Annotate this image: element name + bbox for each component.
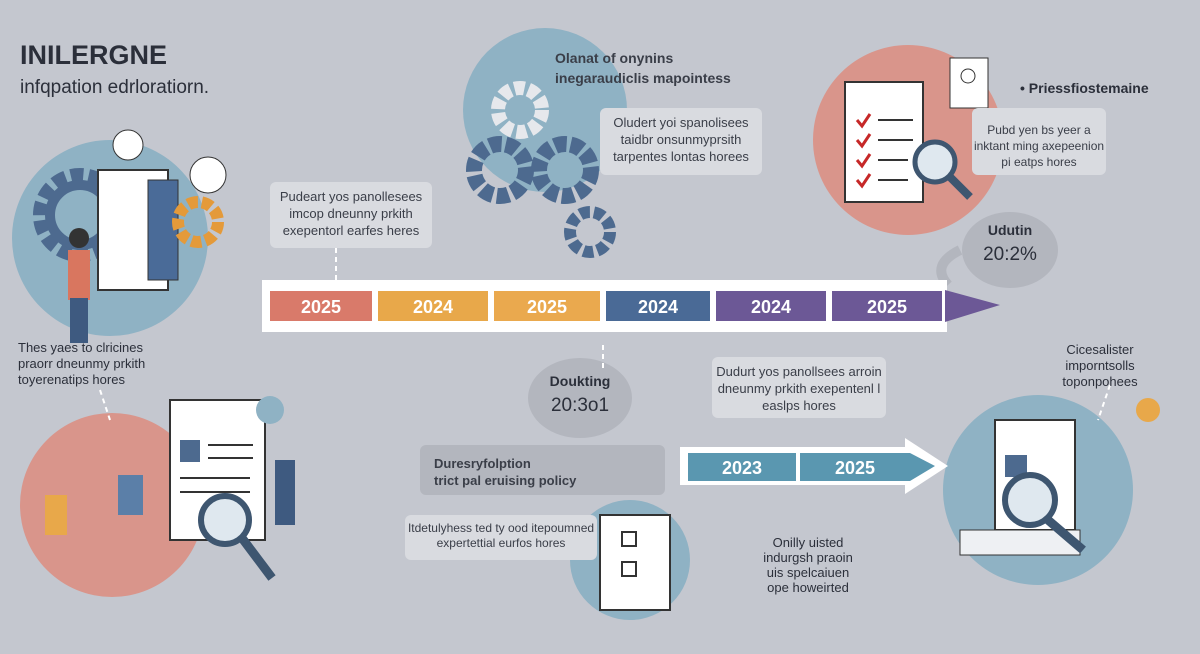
stat: Udutin [983,222,1037,265]
circle: left top [12,130,226,343]
text: left middle: praorr dneunmy prkith [18,356,145,371]
gear heading: inegaraudiclis mapointess [555,70,731,86]
circle: gears [463,28,627,252]
callout: policy: trict pal eruising policy [434,473,576,488]
text: right: Cicesalister imporntsolls toponpohees [1062,342,1138,389]
title: INILERGNE [20,40,167,70]
timeline main: 2025 [867,297,907,317]
timeline main: 2024 [751,297,791,317]
stat: Doukting: Doukting [550,373,610,389]
subtitle: infqpation edrloratiorn. [20,77,209,98]
dashed connectors [100,248,1110,420]
callout: gears: Oludert yoi spanolisees taidbr onsunmyprsith tarpentes lontas horees [613,115,749,164]
callout: middle right: Dudurt yos panollsees arroin dneunmy prkith exepentenl l easlps hores [716,364,882,413]
circle: bottom right [943,395,1160,585]
timeline secondary [680,438,948,494]
stat: Udutin: Udutin [988,222,1032,238]
timeline secondary: 2023 [722,458,762,478]
timeline main: 2024 [413,297,453,317]
callout: left: Pudeart yos panollesees imcop dneunny prkith exepentorl earfes heres [280,189,422,238]
text: left middle: toyerenatips hores [18,372,125,387]
gear heading [555,50,731,86]
circle: checklist [813,45,1003,235]
callout: policy: Duresryfolption [434,456,531,471]
callout: checklist: Pubd yen bs yeer a inktant ming axepeenion pi eatps hores [974,123,1104,169]
checklist heading: • Priessfiostemaine [1020,80,1149,96]
timeline main [262,280,1000,332]
timeline secondary: 2025 [835,458,875,478]
callout: gears [600,108,762,175]
stat: Udutin: 20:2% [983,244,1037,265]
callout: left [270,182,432,248]
callout: bottom text [405,515,597,560]
stat: Doukting [550,373,610,416]
callout: bottom text: Itdetulyhess ted ty ood itepoumned expertettial eurfos hores [408,521,594,550]
text: left middle [18,340,145,387]
bubble: Udutin [941,212,1058,288]
text: left middle: Thes yaes to clricines [18,340,143,355]
circle: bottom left [20,396,295,597]
gear heading: Olanat of onynins [555,50,673,66]
callout: checklist [972,108,1106,175]
timeline main: 2025 [527,297,567,317]
bubble: Doukting [528,358,632,438]
circle: bottom center [570,500,690,620]
callout: policy [420,445,665,495]
stat: Doukting: 20:3o1 [551,395,609,416]
timeline main: 2025 [301,297,341,317]
text: bottom right: Onilly uisted indurgsh praoin uis spelcaiuen ope howeirted [763,535,853,595]
timeline main: 2024 [638,297,678,317]
